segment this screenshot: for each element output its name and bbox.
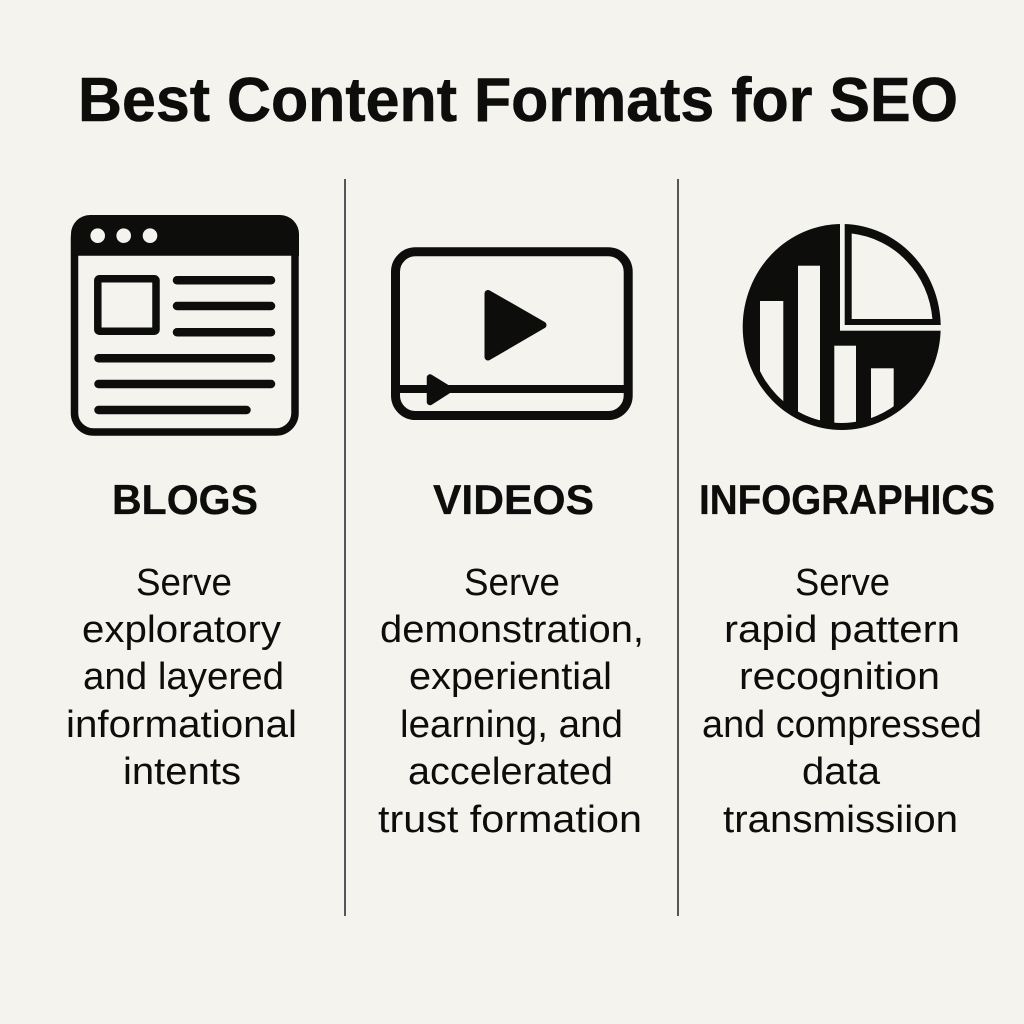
infographic canvas xyxy=(68,76,994,916)
text block: blogs description: Serve xyxy=(136,562,232,604)
panel: videos xyxy=(378,252,644,841)
text block: infographics description: Serve xyxy=(795,562,890,604)
text block: videos description: Serve xyxy=(464,562,560,604)
text block: blogs description: informational xyxy=(66,704,297,746)
icon: charts in circle xyxy=(743,220,945,441)
text block: infographics description: and compressed xyxy=(702,704,982,746)
panel: blogs xyxy=(66,215,299,793)
text block: infographics description: transmissiion xyxy=(723,799,958,841)
text block: infographics description: data xyxy=(802,751,881,793)
text block: infographics description xyxy=(702,562,982,841)
heading: blogs: BLOGS xyxy=(112,476,258,523)
text block: blogs description: exploratory xyxy=(82,609,281,651)
text block: blogs description: and layered xyxy=(83,656,284,698)
text block: blogs description xyxy=(66,562,297,793)
text block: videos description: trust formation xyxy=(378,799,642,841)
text block: videos description: learning, and xyxy=(400,704,623,746)
text block: videos description: experiential xyxy=(409,656,612,698)
icon: video player xyxy=(393,252,631,416)
panel: infographics xyxy=(699,220,995,841)
text block: blogs description: intents xyxy=(123,751,241,793)
text block: videos description: demonstration, xyxy=(380,609,644,651)
heading: videos: VIDEOS xyxy=(433,476,594,523)
text block: infographics description: rapid pattern xyxy=(724,609,960,651)
text block: infographics description: recognition xyxy=(739,656,940,698)
icon: blog browser window xyxy=(71,215,299,432)
heading: infographics: INFOGRAPHICS xyxy=(699,476,995,523)
title: Best Content Formats for SEO xyxy=(78,66,958,135)
text block: videos description: accelerated xyxy=(408,751,613,793)
text block: videos description xyxy=(378,562,644,841)
